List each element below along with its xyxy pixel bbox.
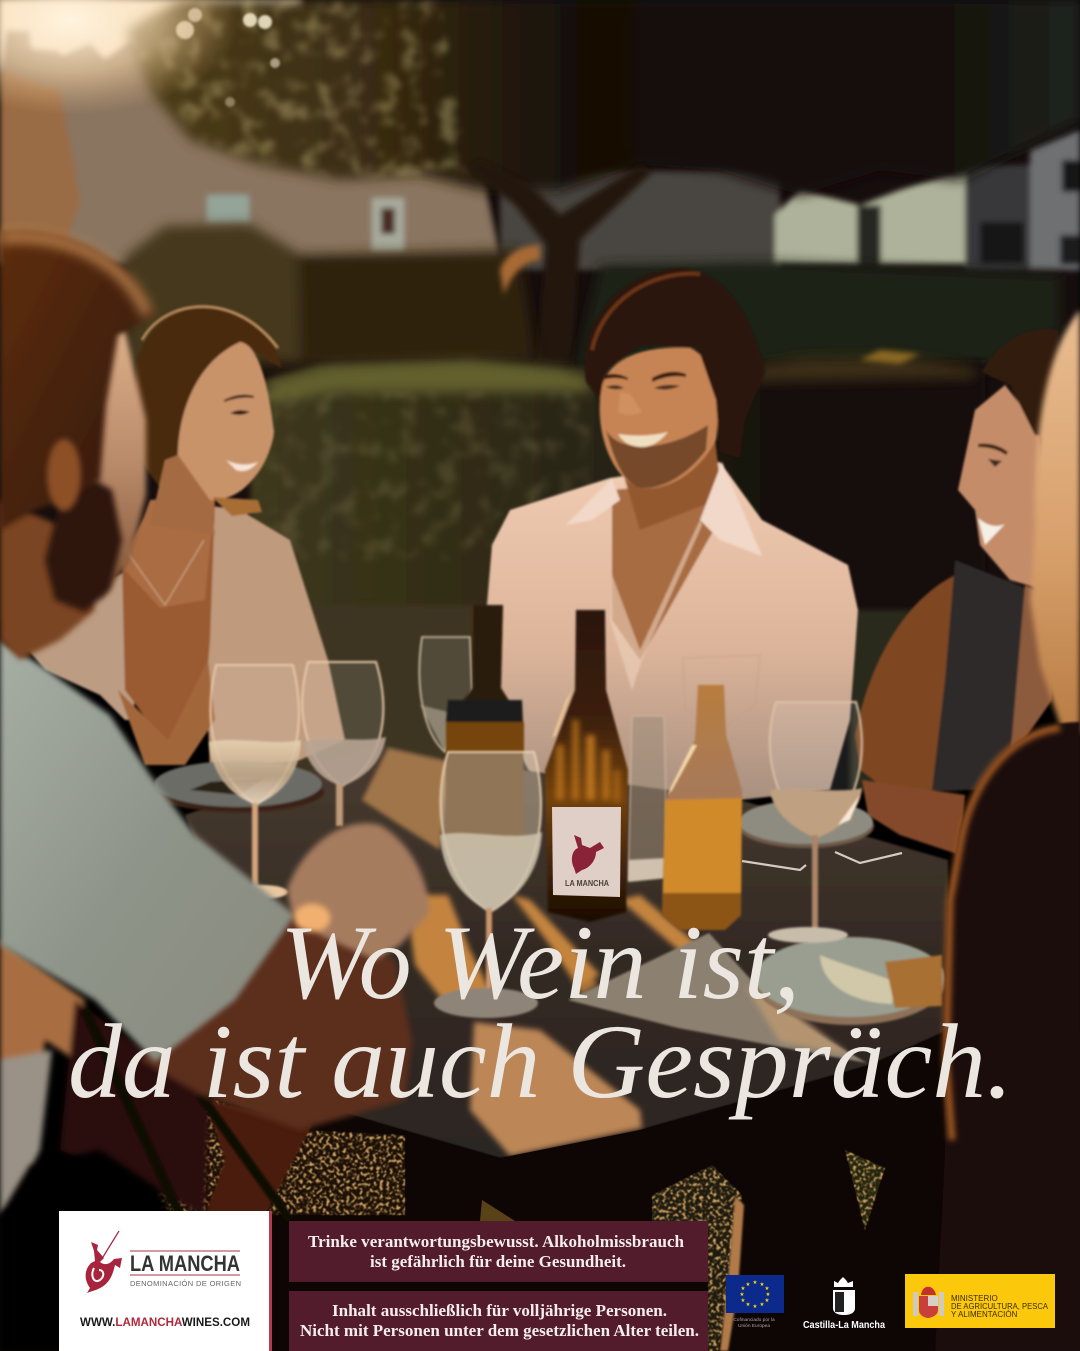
his chest bbox=[612, 480, 728, 660]
plate: left bbox=[152, 761, 324, 812]
notice: adults only: Nicht mit Personen unter dem gesetzlichen Alter teilen. bbox=[300, 1321, 699, 1340]
dark top bbox=[935, 722, 1080, 1351]
icon: ring of stars bbox=[740, 1280, 771, 1310]
icon: ring of stars: ★ bbox=[765, 1298, 770, 1304]
plate: right with food bbox=[754, 937, 946, 1025]
wine glass: left bbox=[209, 665, 301, 899]
ground patch: under left chair bbox=[145, 1090, 405, 1215]
tree leaf highlights bbox=[135, 0, 470, 180]
notice: drink responsibly bbox=[289, 1221, 708, 1282]
napkin bbox=[568, 933, 867, 1063]
her eye and brow bbox=[978, 444, 1008, 455]
tree canopy bbox=[125, 0, 1080, 195]
plate: centre right bbox=[738, 800, 874, 848]
her shirt left side bbox=[20, 570, 135, 720]
her forearm bbox=[862, 780, 965, 855]
hedge leaf texture bbox=[255, 392, 590, 560]
his placket bbox=[610, 520, 702, 690]
notice: drink responsibly: Trinke verantwortungsbewusst. Alkoholmissbrauch bbox=[308, 1232, 684, 1251]
his shirt bbox=[484, 462, 858, 800]
icon: ring of stars: ★ bbox=[746, 1282, 751, 1288]
icon: ring of stars: ★ bbox=[746, 1302, 751, 1308]
his shirt bbox=[0, 640, 295, 1062]
logo: European Union bbox=[726, 1275, 784, 1329]
ground patch: small right bbox=[845, 1150, 885, 1230]
his eyes and brows bbox=[602, 374, 628, 380]
her shirt right side bbox=[205, 505, 345, 770]
black below the table bbox=[0, 1030, 1080, 1351]
tree trunk bbox=[470, 160, 652, 365]
sun glow top-left bbox=[0, 0, 240, 115]
his collar bbox=[700, 462, 762, 556]
his smile bbox=[618, 432, 668, 447]
her hair bbox=[982, 329, 1060, 440]
rim light on shoulder bbox=[946, 728, 1060, 1140]
her smile bbox=[226, 460, 258, 471]
logo card: La Mancha bbox=[59, 1211, 272, 1351]
ground patch: right of table bbox=[652, 1165, 742, 1351]
rule bottom bbox=[130, 1274, 240, 1276]
rule top bbox=[130, 1250, 240, 1252]
bottle: rear, amber glass bbox=[446, 605, 524, 850]
his nose bbox=[618, 392, 642, 415]
her hair tuft bbox=[212, 497, 262, 516]
his hands bbox=[287, 823, 429, 960]
brand subtitle: DENOMINACIÓN DE ORIGEN bbox=[130, 1279, 241, 1288]
her eye and brow bbox=[224, 395, 254, 402]
icon: ring of stars: ★ bbox=[753, 1304, 758, 1310]
seated leg: left bbox=[205, 1100, 312, 1215]
logo: Ministerio bbox=[905, 1274, 1055, 1328]
front hedge bbox=[250, 350, 985, 615]
building on the left bbox=[0, 0, 1080, 620]
his pocket bbox=[683, 655, 760, 730]
ministry text: DE AGRICULTURA, PESCA bbox=[951, 1302, 1049, 1311]
icon: ring of stars: ★ bbox=[765, 1286, 770, 1292]
person: man on the left, foreground bbox=[0, 231, 429, 1351]
shin highlight bbox=[720, 1196, 744, 1351]
ground and legs below the table bbox=[0, 1030, 1080, 1351]
cutlery bbox=[742, 852, 902, 870]
her chest bbox=[1010, 585, 1055, 760]
bottle highlight bbox=[552, 690, 572, 738]
back hedge bbox=[125, 224, 1060, 370]
person: woman on the left bbox=[20, 306, 345, 770]
bottle label emblem bbox=[572, 835, 604, 874]
her neckline fabric bbox=[118, 660, 215, 765]
her necklace bbox=[122, 540, 204, 605]
glass: tumbler bbox=[628, 716, 668, 882]
his hair bbox=[585, 268, 765, 458]
icon: shield bbox=[833, 1290, 855, 1315]
headline line 2: da ist auch Gespräch. bbox=[68, 1003, 1013, 1120]
person: figure in foreground right bbox=[935, 310, 1080, 1351]
icon: ring of stars: ★ bbox=[760, 1282, 765, 1288]
person: man in the centre bbox=[484, 268, 858, 800]
person: woman on the right bbox=[855, 329, 1060, 855]
headline bbox=[68, 904, 1013, 1120]
her face bbox=[178, 342, 274, 500]
his lower body bbox=[0, 940, 210, 1215]
her smile bbox=[978, 518, 1005, 545]
his hair bbox=[0, 231, 155, 530]
his neck bbox=[622, 440, 722, 530]
blonde hair bbox=[1030, 310, 1080, 735]
table top bbox=[185, 745, 948, 1158]
wine glass: front centre bbox=[434, 752, 542, 1018]
ministry text: MINISTERIO bbox=[951, 1294, 998, 1303]
building in the centre and on the right bbox=[500, 130, 1080, 270]
black shadow lower left bbox=[0, 1150, 170, 1351]
bottle glints bbox=[556, 720, 620, 802]
her top bbox=[932, 560, 1030, 790]
icon: ring of stars: ★ bbox=[741, 1298, 746, 1304]
his arm bbox=[140, 916, 412, 1130]
icon: ring of stars: ★ bbox=[753, 1280, 758, 1286]
notice: adults only: Inhalt ausschließlich für volljährige Personen. bbox=[332, 1301, 667, 1320]
sunlight on table bbox=[405, 895, 704, 1156]
her chest bbox=[122, 500, 215, 745]
bottle label text: LA MANCHA bbox=[565, 879, 609, 888]
napkin sun stripe bbox=[745, 985, 850, 1055]
caption: Cofinanciado por la bbox=[733, 1317, 775, 1323]
his ear bbox=[47, 439, 81, 511]
icon: ring of stars: ★ bbox=[766, 1292, 771, 1298]
far sunlit planks bbox=[362, 748, 450, 850]
wine glass: second left bbox=[302, 662, 386, 826]
his neck bbox=[0, 500, 95, 660]
lawn bbox=[250, 605, 960, 795]
wordmark: Castilla-La Mancha bbox=[803, 1319, 885, 1331]
figure arm behind hedge bbox=[500, 245, 540, 295]
icon: crown bbox=[834, 1277, 853, 1287]
his beard bbox=[606, 425, 708, 488]
photo: garden background at sunset bbox=[0, 0, 1080, 795]
his face bbox=[70, 330, 146, 600]
icon: knight on horse emblem bbox=[86, 1231, 122, 1293]
bokeh lights bbox=[176, 8, 280, 107]
bottle label bbox=[552, 807, 621, 897]
icon: Spanish coat of arms bbox=[913, 1287, 944, 1318]
notice: adults only bbox=[289, 1291, 708, 1351]
bottle: amber with La Mancha label bbox=[545, 610, 628, 922]
ministry text: Y ALIMENTACIÓN bbox=[951, 1310, 1018, 1319]
her hair bbox=[135, 306, 282, 495]
notice: drink responsibly: ist gefährlich für deine Gesundheit. bbox=[370, 1252, 626, 1271]
icon: ring of stars: ★ bbox=[741, 1286, 746, 1292]
chair frame bbox=[85, 1010, 290, 1220]
icon: ring of stars: ★ bbox=[740, 1292, 745, 1298]
caption: Unión Europea bbox=[738, 1323, 770, 1329]
table bbox=[152, 745, 948, 1158]
logo: Castilla-La Mancha bbox=[803, 1277, 885, 1331]
ministry text bbox=[951, 1294, 1049, 1319]
bottle: rosé bbox=[662, 685, 742, 930]
headline line 1: Wo Wein ist, bbox=[280, 904, 800, 1021]
wine glass: right bbox=[768, 702, 862, 943]
her face bbox=[958, 385, 1045, 590]
caption bbox=[733, 1317, 775, 1329]
wine glass: small, behind bbox=[419, 637, 472, 752]
website: WWW.LAMANCHAWINES.COM bbox=[80, 1317, 250, 1329]
her upper arm bbox=[855, 575, 960, 790]
icon: ring of stars: ★ bbox=[760, 1302, 765, 1308]
ground patch: small centre bbox=[480, 1200, 515, 1221]
his beard bbox=[45, 470, 122, 612]
brand name: LA MANCHA bbox=[130, 1251, 240, 1276]
his face bbox=[600, 348, 718, 488]
